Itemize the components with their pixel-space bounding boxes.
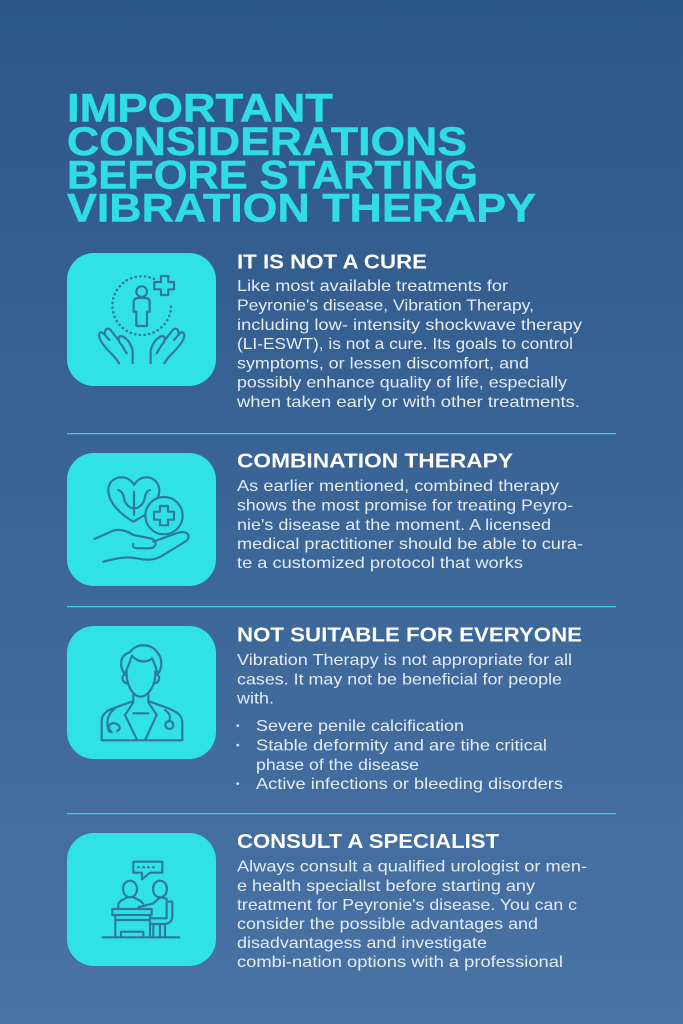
bullet list: Severe penile calcification — [256, 718, 464, 735]
title: CONSIDERATIONS — [67, 120, 467, 164]
heading: CONSULT A SPECIALIST — [237, 830, 500, 853]
text block: Always consult a qualified urologist or men- — [237, 859, 587, 876]
title: BEFORE STARTING — [67, 154, 478, 198]
icon: hands holding person — [67, 253, 216, 386]
text block: (LI-ESWT), is not a cure. Its goals to control — [237, 336, 573, 353]
text block — [237, 478, 583, 572]
text block: Peyronie's disease, Vibration Therapy, — [237, 298, 534, 314]
panel: it is not a cure — [67, 250, 582, 411]
text block: As earlier mentioned, combined therapy — [237, 478, 559, 495]
text block — [236, 278, 582, 411]
heading: COMBINATION THERAPY — [237, 450, 513, 473]
bullet list: • — [236, 779, 240, 790]
text block: consider the possible advantages and — [237, 916, 538, 933]
panel: not suitable for everyone — [67, 624, 582, 793]
text block: e health speciallst before starting any — [237, 878, 535, 895]
icon: consultation at desk — [67, 833, 216, 966]
text block: with. — [236, 690, 274, 707]
bullet list — [236, 718, 563, 793]
heading: NOT SUITABLE FOR EVERYONE — [237, 624, 582, 647]
panel: combination therapy — [67, 450, 583, 586]
text block — [236, 652, 572, 707]
text block: combi-nation options with a professional — [237, 954, 563, 971]
text block: when taken early or with other treatments. — [236, 394, 580, 411]
title: IMPORTANT — [67, 86, 333, 130]
bullet list: • — [236, 721, 240, 732]
text block: Like most available treatments for — [237, 278, 508, 295]
bullet list: • — [236, 740, 240, 752]
panel: consult a specialist — [67, 830, 587, 971]
text block: Vibration Therapy is not appropriate for all — [237, 652, 572, 669]
text block: te a customized protocol that works — [237, 555, 523, 572]
text block: symptoms, or lessen discomfort, and — [237, 356, 529, 372]
bullet list: Active infections or bleeding disorders — [256, 776, 563, 793]
text block: shows the most promise for treating Peyro- — [237, 498, 573, 514]
text block: medical practitioner should be able to cura- — [237, 536, 583, 553]
text block: cases. It may not be beneficial for people — [237, 671, 562, 688]
title — [67, 86, 536, 230]
title: VIBRATION THERAPY — [67, 186, 536, 230]
bullet list: Stable deformity and are tihe critical — [256, 738, 547, 754]
heading: IT IS NOT A CURE — [237, 250, 427, 273]
text block: possibly enhance quality of life, especially — [237, 374, 567, 392]
text block — [237, 859, 587, 971]
text block: including low- intensity shockwave therapy — [237, 317, 582, 334]
text block: disadvantagess and investigate — [237, 935, 487, 952]
icon: doctor — [67, 626, 216, 759]
text block: nie's disease at the moment. A licensed — [237, 517, 551, 534]
text block: treatment for Peyronie's disease. You can c — [237, 897, 577, 914]
icon: hand with heart and cross — [67, 453, 216, 586]
bullet list: phase of the disease — [256, 757, 419, 774]
